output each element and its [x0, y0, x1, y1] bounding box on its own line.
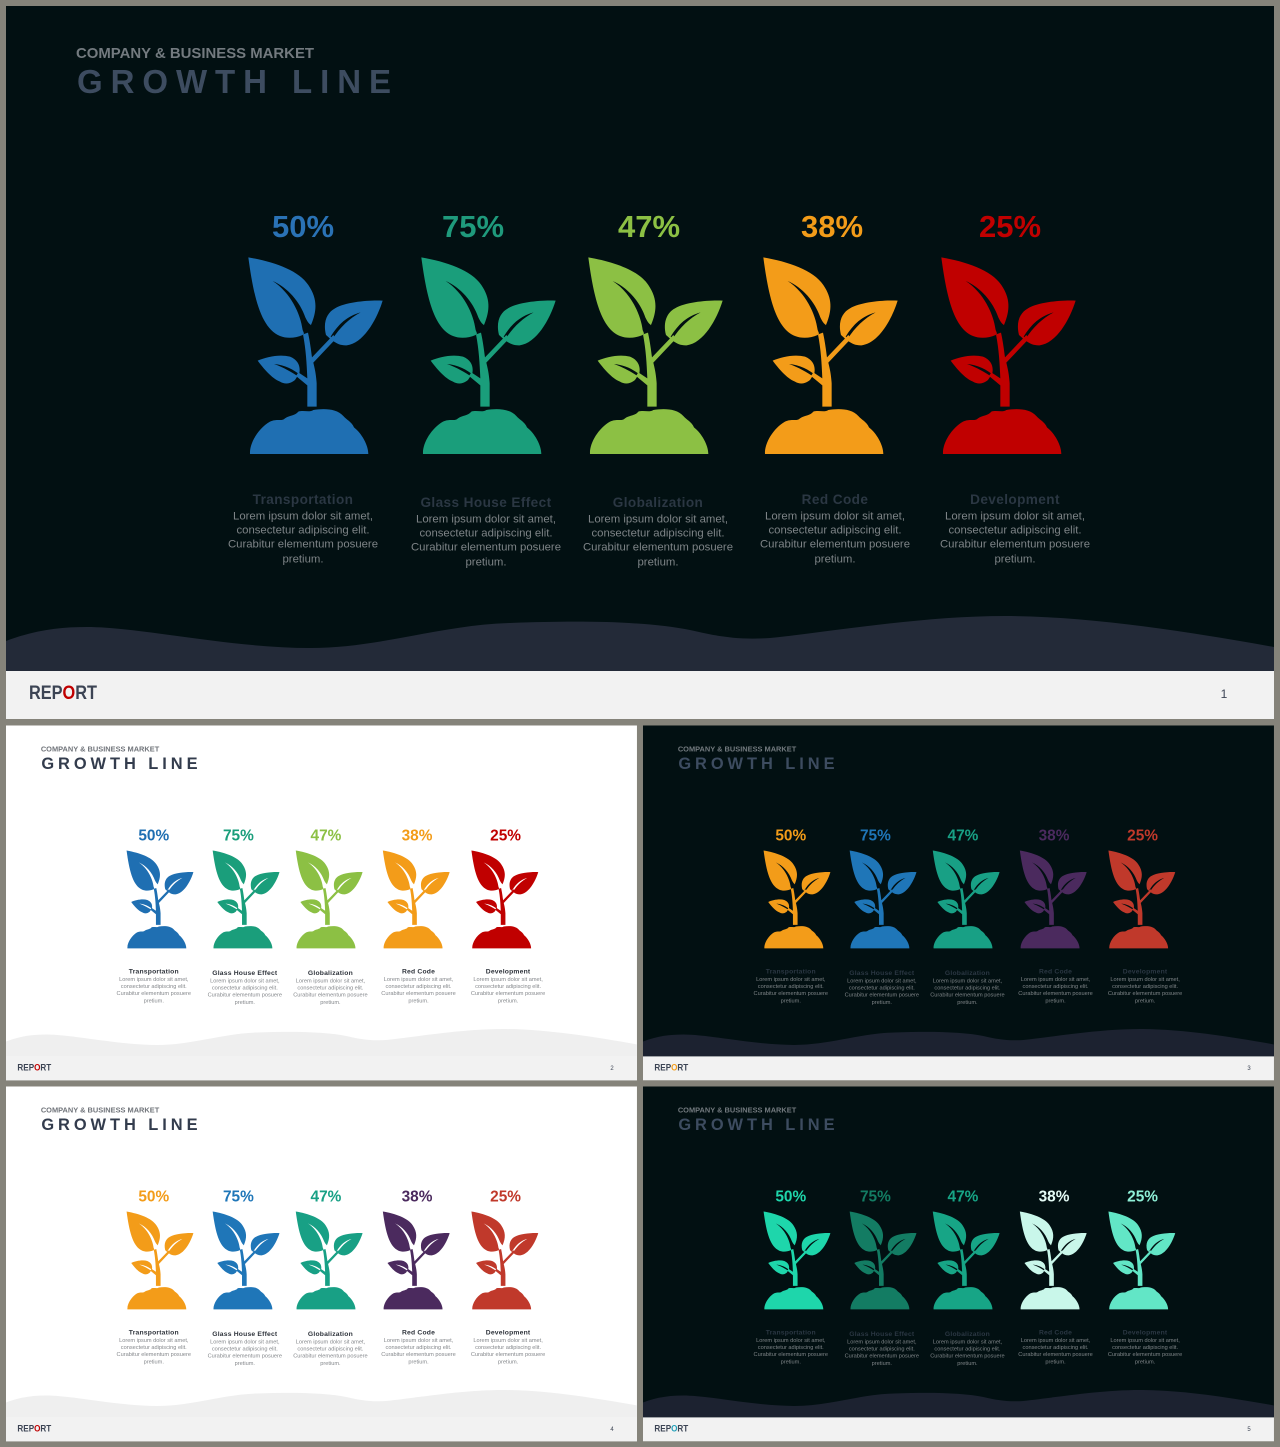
description: Lorem ipsum dolor sit amet, [416, 514, 556, 526]
description: Lorem ipsum dolor sit amet, [384, 1338, 454, 1344]
item: Globalization [293, 827, 368, 1006]
description: pretium. [144, 998, 164, 1004]
percent: 38% [402, 1188, 433, 1205]
subtitle: COMPANY & BUSINESS MARKET [41, 744, 160, 753]
heading: Globalization [613, 495, 703, 510]
description: Curabitur elementum posuere [1018, 991, 1093, 997]
description: Curabitur elementum posuere [583, 542, 733, 554]
item: Glass House Effect [411, 209, 561, 568]
description: Lorem ipsum dolor sit amet, [933, 978, 1003, 984]
footer bar [6, 1417, 637, 1441]
slide 4: white slide, warm palette [6, 1086, 637, 1441]
wave [6, 616, 1274, 671]
percent: 47% [618, 209, 680, 244]
description: consectetur adipiscing elit. [212, 985, 278, 991]
description: consectetur adipiscing elit. [934, 985, 1001, 991]
description: pretium. [466, 556, 506, 568]
percent: 47% [948, 827, 979, 844]
heading: Glass House Effect [849, 1331, 915, 1338]
icon: plant [471, 1212, 538, 1309]
icon: plant [471, 851, 538, 948]
description: Lorem ipsum dolor sit amet, [119, 977, 189, 983]
description: Lorem ipsum dolor sit amet, [210, 978, 280, 984]
percent: 38% [801, 209, 863, 244]
item: Transportation [754, 1188, 830, 1365]
icon: plant [850, 1212, 917, 1309]
footer logo: REPORT [29, 683, 97, 704]
item: Transportation [117, 827, 193, 1004]
description: Lorem ipsum dolor sit amet, [588, 514, 728, 526]
item: Red Code [1018, 1188, 1093, 1365]
item: Red Code [381, 1188, 456, 1365]
icon: plant [850, 851, 917, 948]
description: pretium. [283, 554, 323, 566]
heading: Development [486, 1329, 531, 1336]
footer logo: REPORT [17, 1423, 51, 1434]
description: consectetur adipiscing elit. [849, 1346, 915, 1352]
footer bar [6, 1056, 637, 1080]
slide background [6, 1086, 637, 1441]
heading: Globalization [945, 970, 990, 977]
icon: plant [588, 257, 723, 454]
icon: plant [383, 1212, 450, 1309]
icon: plant [127, 1212, 193, 1309]
page number: 4 [610, 1427, 614, 1433]
title: GROWTH LINE [41, 755, 198, 773]
item: Glass House Effect [845, 1188, 919, 1367]
description: Curabitur elementum posuere [471, 1352, 545, 1358]
subtitle: COMPANY & BUSINESS MARKET [76, 45, 314, 62]
heading: Globalization [308, 1331, 353, 1338]
item: Transportation [754, 827, 830, 1004]
description: pretium. [815, 554, 855, 566]
icon: plant [421, 257, 556, 454]
slide background [6, 6, 1274, 671]
description: Curabitur elementum posuere [117, 1352, 191, 1358]
subtitle: COMPANY & BUSINESS MARKET [41, 1105, 160, 1114]
description: Lorem ipsum dolor sit amet, [765, 510, 905, 522]
description: Curabitur elementum posuere [845, 992, 919, 998]
item: Development [940, 209, 1090, 566]
page number: 1 [1221, 687, 1228, 701]
heading: Red Code [802, 492, 868, 507]
icon: plant [941, 257, 1076, 454]
heading: Development [486, 968, 531, 975]
description: consectetur adipiscing elit. [758, 1345, 824, 1351]
subtitle: COMPANY & BUSINESS MARKET [678, 1105, 797, 1114]
description: Lorem ipsum dolor sit amet, [933, 1339, 1003, 1345]
description: Lorem ipsum dolor sit amet, [233, 510, 373, 522]
icon: plant [764, 851, 830, 948]
description: Lorem ipsum dolor sit amet, [1110, 977, 1180, 983]
wave [6, 1029, 637, 1056]
percent: 25% [490, 1188, 521, 1205]
description: pretium. [144, 1359, 164, 1365]
percent: 50% [775, 827, 806, 844]
percent: 47% [311, 827, 342, 844]
item: Globalization [930, 1188, 1005, 1367]
heading: Red Code [402, 968, 435, 975]
description: consectetur adipiscing elit. [236, 524, 370, 536]
description: Lorem ipsum dolor sit amet, [847, 1339, 917, 1345]
description: consectetur adipiscing elit. [297, 1346, 364, 1352]
page number: 2 [610, 1066, 614, 1072]
icon: plant [1108, 1212, 1175, 1309]
heading: Globalization [308, 970, 353, 977]
percent: 38% [1039, 827, 1070, 844]
percent: 50% [272, 209, 334, 244]
description: Curabitur elementum posuere [760, 538, 910, 550]
icon: plant [764, 1212, 830, 1309]
description: pretium. [235, 1000, 255, 1006]
title: GROWTH LINE [41, 1116, 198, 1134]
page number: 3 [1247, 1066, 1251, 1072]
heading: Globalization [945, 1331, 990, 1338]
description: consectetur adipiscing elit. [297, 985, 364, 991]
description: pretium. [408, 998, 429, 1004]
description: consectetur adipiscing elit. [758, 984, 824, 990]
description: Curabitur elementum posuere [754, 1352, 828, 1358]
heading: Development [970, 492, 1060, 507]
description: Lorem ipsum dolor sit amet, [756, 977, 826, 983]
slide background [643, 725, 1274, 1056]
percent: 25% [490, 827, 521, 844]
description: consectetur adipiscing elit. [1023, 1345, 1089, 1351]
heading: Transportation [129, 968, 179, 975]
item: Glass House Effect [208, 827, 282, 1006]
item: Transportation [117, 1188, 193, 1365]
description: Curabitur elementum posuere [1108, 991, 1182, 997]
slide 3: dark slide, warm palette [643, 725, 1274, 1080]
description: pretium. [957, 1361, 978, 1367]
percent: 50% [138, 827, 169, 844]
description: consectetur adipiscing elit. [849, 985, 915, 991]
description: Lorem ipsum dolor sit amet, [945, 510, 1085, 522]
description: pretium. [781, 1359, 801, 1365]
heading: Transportation [766, 1329, 816, 1336]
description: consectetur adipiscing elit. [768, 524, 902, 536]
description: pretium. [872, 1000, 892, 1006]
description: consectetur adipiscing elit. [475, 984, 541, 990]
item: Development [1108, 827, 1182, 1004]
description: consectetur adipiscing elit. [934, 1346, 1001, 1352]
heading: Development [1123, 968, 1168, 975]
percent: 75% [860, 1188, 891, 1205]
description: consectetur adipiscing elit. [1023, 984, 1089, 990]
description: pretium. [320, 1361, 341, 1367]
slide background [6, 725, 637, 1080]
description: pretium. [995, 554, 1035, 566]
footer logo: REPORT [17, 1062, 51, 1073]
item: Globalization [930, 827, 1005, 1006]
item: Transportation [228, 209, 383, 566]
percent: 25% [1127, 827, 1158, 844]
item: Red Code [1018, 827, 1093, 1004]
item: Development [471, 827, 545, 1004]
description: Lorem ipsum dolor sit amet, [384, 977, 454, 983]
slide 2: white slide [6, 725, 637, 1080]
description: Curabitur elementum posuere [411, 542, 561, 554]
wave [643, 1390, 1274, 1417]
percent: 47% [311, 1188, 342, 1205]
percent: 50% [775, 1188, 806, 1205]
icon: plant [383, 851, 450, 948]
percent: 38% [402, 827, 433, 844]
icon: plant [933, 851, 1000, 948]
description: Curabitur elementum posuere [293, 992, 368, 998]
description: consectetur adipiscing elit. [591, 528, 725, 540]
description: Lorem ipsum dolor sit amet, [1110, 1338, 1180, 1344]
description: Curabitur elementum posuere [208, 992, 282, 998]
wave [6, 1390, 637, 1417]
heading: Development [1123, 1329, 1168, 1336]
heading: Red Code [1039, 1329, 1072, 1336]
description: Curabitur elementum posuere [117, 991, 191, 997]
percent: 50% [138, 1188, 169, 1205]
heading: Red Code [1039, 968, 1072, 975]
item: Globalization [293, 1188, 368, 1367]
percent: 75% [223, 827, 254, 844]
description: Lorem ipsum dolor sit amet, [847, 978, 917, 984]
icon: plant [933, 1212, 1000, 1309]
description: Curabitur elementum posuere [930, 1353, 1005, 1359]
description: consectetur adipiscing elit. [212, 1346, 278, 1352]
item: Glass House Effect [208, 1188, 282, 1367]
heading: Transportation [766, 968, 816, 975]
description: Lorem ipsum dolor sit amet, [473, 1338, 543, 1344]
item: Red Code [381, 827, 456, 1004]
description: pretium. [872, 1361, 892, 1367]
description: Curabitur elementum posuere [293, 1353, 368, 1359]
description: Curabitur elementum posuere [845, 1353, 919, 1359]
description: consectetur adipiscing elit. [386, 984, 452, 990]
title: GROWTH LINE [678, 755, 835, 773]
slide 1: large dark slide [6, 6, 1274, 719]
description: pretium. [957, 1000, 978, 1006]
description: pretium. [1045, 998, 1066, 1004]
heading: Glass House Effect [420, 495, 552, 510]
description: Curabitur elementum posuere [1018, 1352, 1093, 1358]
subtitle: COMPANY & BUSINESS MARKET [678, 744, 797, 753]
heading: Glass House Effect [212, 1331, 278, 1338]
description: pretium. [320, 1000, 341, 1006]
item: Red Code [760, 209, 910, 566]
icon: plant [296, 1212, 363, 1309]
description: Lorem ipsum dolor sit amet, [119, 1338, 189, 1344]
description: Lorem ipsum dolor sit amet, [756, 1338, 826, 1344]
page number: 5 [1247, 1427, 1251, 1433]
slide 5: dark slide, teal palette [643, 1086, 1274, 1441]
icon: plant [213, 1212, 280, 1309]
heading: Transportation [253, 492, 353, 507]
description: Curabitur elementum posuere [1108, 1352, 1182, 1358]
wave [643, 1029, 1274, 1056]
heading: Transportation [129, 1329, 179, 1336]
icon: plant [1020, 1212, 1087, 1309]
percent: 38% [1039, 1188, 1070, 1205]
description: Curabitur elementum posuere [754, 991, 828, 997]
item: Globalization [583, 209, 733, 568]
title: GROWTH LINE [77, 63, 391, 100]
description: pretium. [1135, 998, 1156, 1004]
description: Curabitur elementum posuere [381, 991, 456, 997]
description: Curabitur elementum posuere [471, 991, 545, 997]
item: Development [1108, 1188, 1182, 1365]
icon: plant [1020, 851, 1087, 948]
footer logo: REPORT [654, 1062, 688, 1073]
description: pretium. [1045, 1359, 1066, 1365]
description: consectetur adipiscing elit. [475, 1345, 541, 1351]
description: pretium. [498, 1359, 519, 1365]
description: Lorem ipsum dolor sit amet, [210, 1339, 280, 1345]
description: consectetur adipiscing elit. [1112, 984, 1178, 990]
heading: Red Code [402, 1329, 435, 1336]
description: Lorem ipsum dolor sit amet, [1021, 977, 1091, 983]
icon: plant [1108, 851, 1175, 948]
description: pretium. [781, 998, 801, 1004]
footer bar [6, 671, 1274, 719]
description: pretium. [638, 556, 678, 568]
icon: plant [213, 851, 280, 948]
item: Glass House Effect [845, 827, 919, 1006]
description: pretium. [1135, 1359, 1156, 1365]
description: pretium. [235, 1361, 255, 1367]
footer bar [643, 1056, 1274, 1080]
description: consectetur adipiscing elit. [948, 524, 1082, 536]
description: Lorem ipsum dolor sit amet, [296, 978, 366, 984]
description: Curabitur elementum posuere [208, 1353, 282, 1359]
percent: 75% [442, 209, 504, 244]
description: pretium. [498, 998, 519, 1004]
description: Lorem ipsum dolor sit amet, [296, 1339, 366, 1345]
icon: plant [296, 851, 363, 948]
heading: Glass House Effect [849, 970, 915, 977]
description: consectetur adipiscing elit. [121, 984, 187, 990]
description: Curabitur elementum posuere [228, 538, 378, 550]
percent: 25% [1127, 1188, 1158, 1205]
description: Lorem ipsum dolor sit amet, [473, 977, 543, 983]
description: consectetur adipiscing elit. [419, 528, 553, 540]
description: Curabitur elementum posuere [940, 538, 1090, 550]
footer bar [643, 1417, 1274, 1441]
heading: Glass House Effect [212, 970, 278, 977]
description: consectetur adipiscing elit. [386, 1345, 452, 1351]
description: Lorem ipsum dolor sit amet, [1021, 1338, 1091, 1344]
description: pretium. [408, 1359, 429, 1365]
description: consectetur adipiscing elit. [121, 1345, 187, 1351]
percent: 25% [979, 209, 1041, 244]
description: consectetur adipiscing elit. [1112, 1345, 1178, 1351]
description: Curabitur elementum posuere [930, 992, 1005, 998]
description: Curabitur elementum posuere [381, 1352, 456, 1358]
icon: plant [763, 257, 898, 454]
percent: 75% [860, 827, 891, 844]
title: GROWTH LINE [678, 1116, 835, 1134]
percent: 75% [223, 1188, 254, 1205]
icon: plant [248, 257, 383, 454]
icon: plant [127, 851, 193, 948]
footer logo: REPORT [654, 1423, 688, 1434]
percent: 47% [948, 1188, 979, 1205]
item: Development [471, 1188, 545, 1365]
slide background [643, 1086, 1274, 1417]
